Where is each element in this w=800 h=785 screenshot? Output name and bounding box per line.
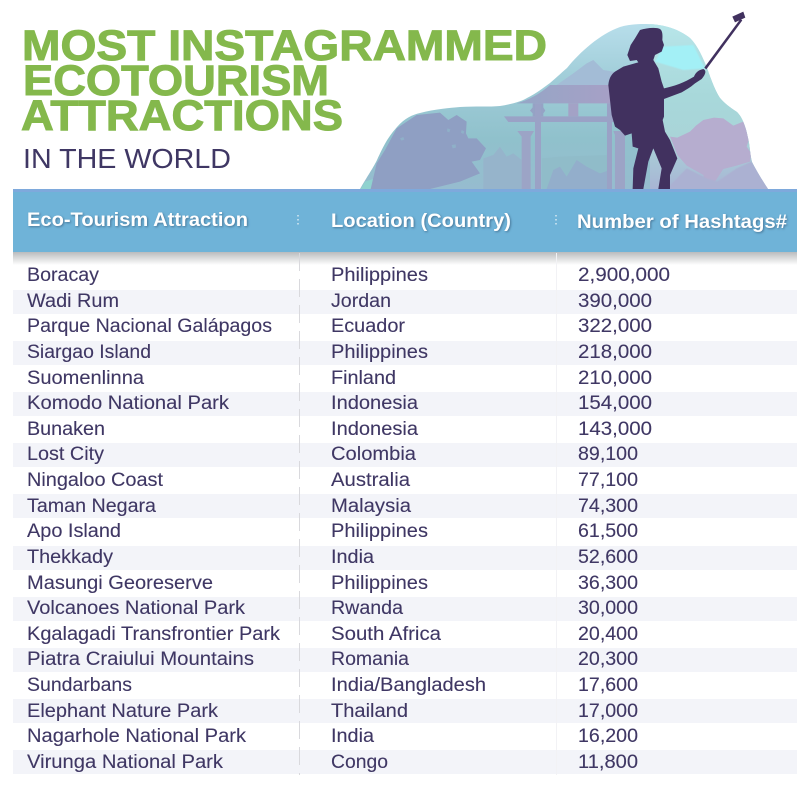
row: Thekkady: 52,600	[578, 547, 638, 568]
row: Kgalagadi Transfrontier Park: South Africa	[331, 624, 441, 645]
row: Suomenlinna	[27, 368, 652, 389]
row: Siargao Island: Philippines	[331, 342, 428, 363]
row: Parque Nacional Galápagos: Parque Nacional Galápagos	[27, 316, 272, 337]
row: Masungi Georeserve: Philippines	[331, 573, 428, 594]
row: Elephant Nature Park: 17,000	[578, 701, 638, 722]
row: Komodo National Park: Komodo National Park	[27, 393, 230, 414]
row: Komodo National Park: 154,000	[578, 393, 652, 414]
row: Boracay: 2,900,000	[578, 265, 670, 286]
row: Taman Negara: Malaysia	[331, 496, 411, 517]
row: Piatra Craiului Mountains: Romania	[331, 649, 409, 670]
row: Wadi Rum: Wadi Rum	[27, 291, 119, 312]
landscape blob	[355, 20, 775, 190]
row: Virunga National Park: Congo	[331, 752, 388, 773]
row: Siargao Island	[27, 342, 652, 363]
row: Parque Nacional Galápagos	[27, 316, 652, 337]
row: Lost City: Lost City	[27, 444, 105, 465]
row: Lost City	[27, 444, 638, 465]
row: Masungi Georeserve	[27, 573, 638, 594]
row: Parque Nacional Galápagos: Ecuador	[331, 316, 406, 337]
row: Virunga National Park	[27, 752, 638, 773]
title: ATTRACTIONS	[21, 92, 343, 140]
row: Boracay: Boracay	[27, 265, 100, 286]
row: Suomenlinna: Suomenlinna	[27, 368, 144, 389]
table header: Eco-Tourism Attraction	[27, 209, 248, 231]
table header	[13, 189, 797, 252]
row: Nagarhole National Park: India	[331, 726, 374, 747]
row: Ningaloo Coast: Australia	[331, 470, 410, 491]
row: Bunaken: Bunaken	[27, 419, 105, 440]
title	[21, 22, 547, 140]
row: Boracay	[27, 265, 670, 286]
row: Komodo National Park: Indonesia	[331, 393, 418, 414]
row: Piatra Craiului Mountains: 20,300	[578, 649, 638, 670]
row: Thekkady: Thekkady	[27, 547, 114, 568]
table header shadow	[13, 251, 797, 265]
table	[13, 189, 797, 775]
row: Volcanoes National Park	[27, 598, 638, 619]
traveller silhouette with backpack and selfie stick	[608, 12, 745, 189]
row: Sundarbans: Sundarbans	[27, 675, 132, 696]
illustration: traveller taking a selfie in a landscape	[355, 12, 775, 190]
row: Parque Nacional Galápagos: 322,000	[578, 316, 652, 337]
row: Wadi Rum: 390,000	[578, 291, 652, 312]
row: Apo Island	[27, 521, 638, 542]
row: Bunaken: 143,000	[578, 419, 652, 440]
row: Taman Negara: 74,300	[578, 496, 638, 517]
row: Elephant Nature Park: Thailand	[331, 701, 408, 722]
row: Suomenlinna: 210,000	[578, 368, 652, 389]
row: Ningaloo Coast	[27, 470, 638, 491]
row: Thekkady: India	[331, 547, 374, 568]
row: Taman Negara	[27, 496, 638, 517]
row: Thekkady	[27, 547, 638, 568]
row: Virunga National Park: Virunga National Park	[27, 752, 224, 773]
row: Piatra Craiului Mountains: Piatra Craiului Mountains	[27, 649, 254, 670]
row: Piatra Craiului Mountains	[27, 649, 638, 670]
row: Sundarbans: India/Bangladesh	[331, 675, 486, 696]
row: Elephant Nature Park: Elephant Nature Park	[27, 701, 219, 722]
row: Masungi Georeserve: 36,300	[578, 573, 638, 594]
row: Taman Negara: Taman Negara	[27, 496, 156, 517]
row: Komodo National Park	[27, 393, 652, 414]
row: Lost City: Colombia	[331, 444, 416, 465]
title: MOST INSTAGRAMMED	[22, 22, 547, 70]
row: Virunga National Park: 11,800	[578, 752, 638, 773]
row: Sundarbans	[27, 675, 638, 696]
row: Elephant Nature Park	[27, 701, 638, 722]
row: Bunaken: Indonesia	[331, 419, 418, 440]
row: Siargao Island: Siargao Island	[27, 342, 151, 363]
row: Wadi Rum	[27, 291, 652, 312]
row: Nagarhole National Park: 16,200	[578, 726, 638, 747]
row: Nagarhole National Park	[27, 726, 638, 747]
row: Nagarhole National Park: Nagarhole National Park	[27, 726, 247, 747]
row: Suomenlinna: Finland	[331, 368, 396, 389]
row: Kgalagadi Transfrontier Park: Kgalagadi Transfrontier Park	[27, 624, 281, 645]
row: Siargao Island: 218,000	[578, 342, 652, 363]
row: Apo Island: 61,500	[578, 521, 638, 542]
table header: Location (Country)	[331, 210, 511, 232]
subtitle: IN THE WORLD	[23, 143, 231, 174]
row: Kgalagadi Transfrontier Park	[27, 624, 638, 645]
row: Masungi Georeserve: Masungi Georeserve	[27, 573, 213, 594]
row: Kgalagadi Transfrontier Park: 20,400	[578, 624, 638, 645]
row: Boracay: Philippines	[331, 265, 428, 286]
row: Bunaken	[27, 419, 652, 440]
row: Volcanoes National Park: 30,000	[578, 598, 638, 619]
row: Apo Island: Philippines	[331, 521, 428, 542]
title: ECOTOURISM	[23, 57, 329, 105]
row: Volcanoes National Park: Rwanda	[331, 598, 403, 619]
row: Lost City: 89,100	[578, 444, 638, 465]
row: Sundarbans: 17,600	[578, 675, 638, 696]
row: Apo Island: Apo Island	[27, 521, 121, 542]
row: Wadi Rum: Jordan	[331, 291, 391, 312]
row: Ningaloo Coast: 77,100	[578, 470, 638, 491]
table header: Number of Hashtags#	[577, 211, 787, 233]
row: Ningaloo Coast: Ningaloo Coast	[27, 470, 164, 491]
row: Volcanoes National Park: Volcanoes National Park	[27, 598, 246, 619]
